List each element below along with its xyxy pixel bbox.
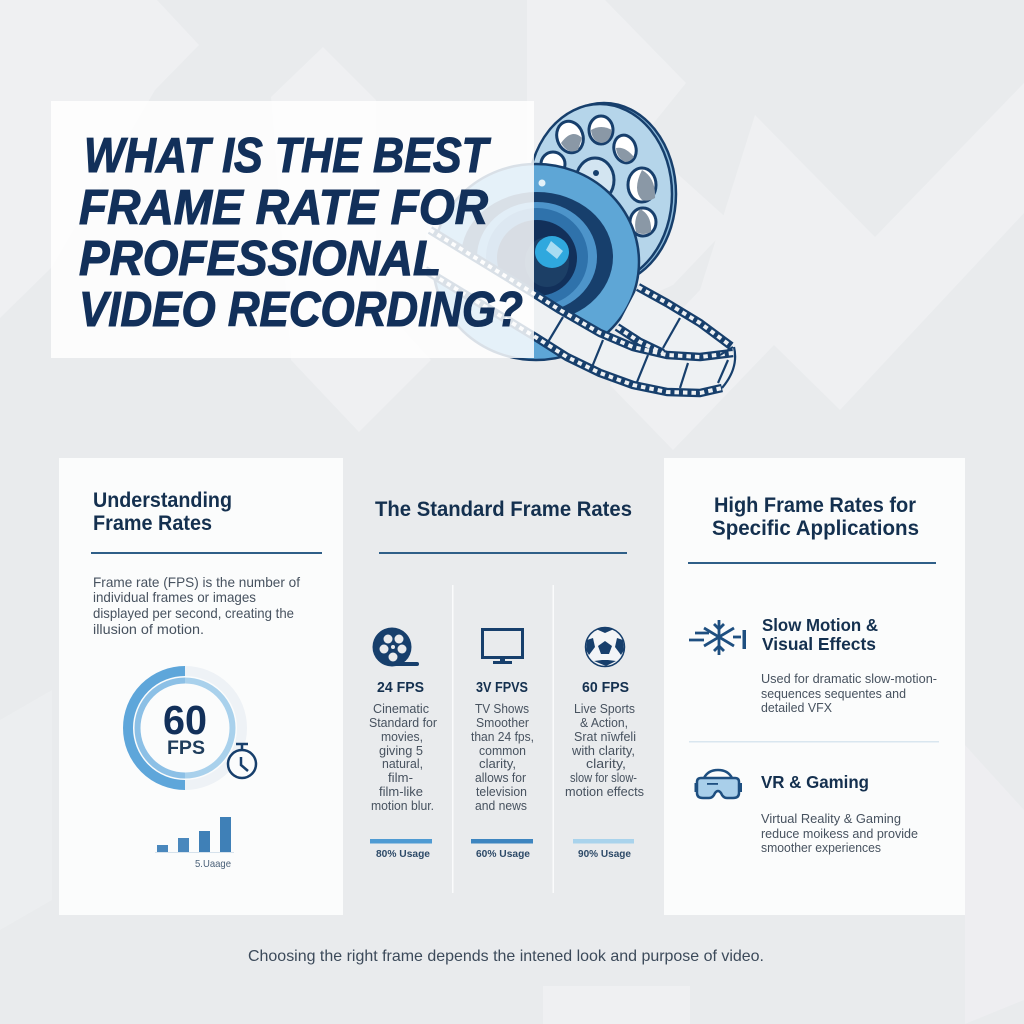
bar chart: 5.Uaage [195, 858, 231, 870]
title: WHAT IS THE BEST [84, 129, 492, 183]
column: 30 FPS [471, 630, 534, 860]
icon: television [482, 630, 522, 664]
column: 30 FPS: TV Shows [475, 702, 529, 716]
definition text: individual frames or images [93, 589, 256, 605]
column: 24 FPS: giving 5 [379, 744, 423, 758]
column: 30 FPS: Smoother [476, 716, 529, 730]
definition text [93, 574, 300, 637]
column: 60 FPS: slow for slow- [570, 771, 637, 785]
title: PROFESSIONAL [79, 232, 441, 286]
icon: film reel [372, 628, 419, 666]
title [79, 129, 523, 337]
column: 60 FPS: clarity, [586, 757, 626, 771]
heading: standard frame rates: The Standard Frame Rates [375, 498, 632, 521]
item: VR and gaming: reduce moikess and provide [761, 827, 918, 841]
gauge: 60 FPS [128, 671, 242, 785]
column: 60 FPS: Srat nīwfeli [574, 730, 636, 744]
item: slow motion and visual effects: Used for dramatic slow-motion- [761, 672, 937, 686]
column: 24 FPS: Standard for [369, 716, 437, 730]
icon: VR headset [694, 770, 742, 798]
item: slow motion and visual effects: Slow Motion & [762, 615, 878, 635]
heading: high frame rates: High Frame Rates for [714, 494, 916, 517]
film strip [420, 225, 736, 393]
item: slow motion and visual effects: Visual Effects [762, 634, 876, 654]
camera lens [433, 164, 639, 360]
column: 30 FPS: television [476, 785, 527, 799]
column: 24 FPS: Cinematic [373, 702, 429, 716]
gauge: 60 FPS: FPS [167, 738, 205, 759]
column: 24 FPS: film-like [379, 785, 423, 799]
column: 30 FPS: than 24 fps, [471, 730, 534, 744]
column: 60 FPS: 90% Usage [578, 848, 631, 860]
column: 60 FPS: & Action, [580, 716, 628, 730]
column: 60 FPS: motion effects [565, 785, 644, 799]
column: 30 FPS: common [479, 744, 526, 758]
definition text: displayed per second, creating the [93, 605, 294, 621]
column: 30 FPS: clarity, [479, 757, 516, 771]
heading: understanding frame rates [93, 489, 232, 535]
illustration: film reel and camera lens with film strip [420, 103, 736, 393]
column: 30 FPS: 60% Usage [476, 848, 530, 860]
column: 24 FPS: film- [388, 771, 413, 785]
item: slow motion and visual effects [689, 615, 937, 715]
item: slow motion and visual effects: sequences sequentes and [761, 687, 906, 701]
title: VIDEO RECORDING? [79, 283, 523, 337]
item: slow motion and visual effects: detailed VFX [761, 701, 833, 715]
title: FRAME RATE FOR [79, 181, 489, 235]
column: 60 FPS: 60 FPS [582, 679, 629, 696]
icon: stopwatch [228, 744, 256, 778]
column: 60 FPS: with clarity, [571, 744, 635, 758]
title panel [51, 101, 534, 358]
column: 30 FPS: allows for [475, 771, 526, 785]
item: VR and gaming: VR & Gaming [761, 772, 869, 792]
heading: understanding frame rates: Understanding [93, 489, 232, 512]
column: 30 FPS: and news [475, 799, 527, 813]
film reel [528, 103, 676, 285]
column: 24 FPS: 24 FPS [377, 679, 424, 696]
panel: high frame rates [664, 458, 965, 915]
column: 60 FPS [565, 628, 644, 860]
column: 24 FPS: 80% Usage [376, 848, 430, 860]
heading: high frame rates: Specific Applications [712, 517, 919, 540]
column: 24 FPS: movies, [381, 730, 423, 744]
column: 60 FPS: Live Sports [574, 702, 635, 716]
column: 30 FPS: 3V FPVS [476, 679, 528, 696]
icon: snowflake with motion lines [689, 620, 746, 655]
heading: understanding frame rates: Frame Rates [93, 512, 212, 535]
panel: standard frame rates [369, 498, 644, 893]
item: VR and gaming: smoother experiences [761, 841, 881, 855]
item: VR and gaming: Virtual Reality & Gaming [761, 812, 901, 826]
panel: understanding frame rates [59, 458, 343, 915]
gauge: 60 FPS: 60 [163, 697, 207, 743]
column: 24 FPS: motion blur. [371, 799, 434, 813]
footer text: Choosing the right frame depends the intened look and purpose of video. [248, 948, 764, 965]
definition text: illusion of motion. [93, 621, 204, 637]
column: 24 FPS [369, 628, 437, 860]
icon: soccer ball [586, 628, 624, 666]
definition text: Frame rate (FPS) is the number of [93, 574, 300, 590]
heading: high frame rates [712, 494, 919, 540]
bar chart [155, 817, 234, 870]
item: VR and gaming [694, 770, 918, 855]
column: 24 FPS: natural, [382, 757, 423, 771]
